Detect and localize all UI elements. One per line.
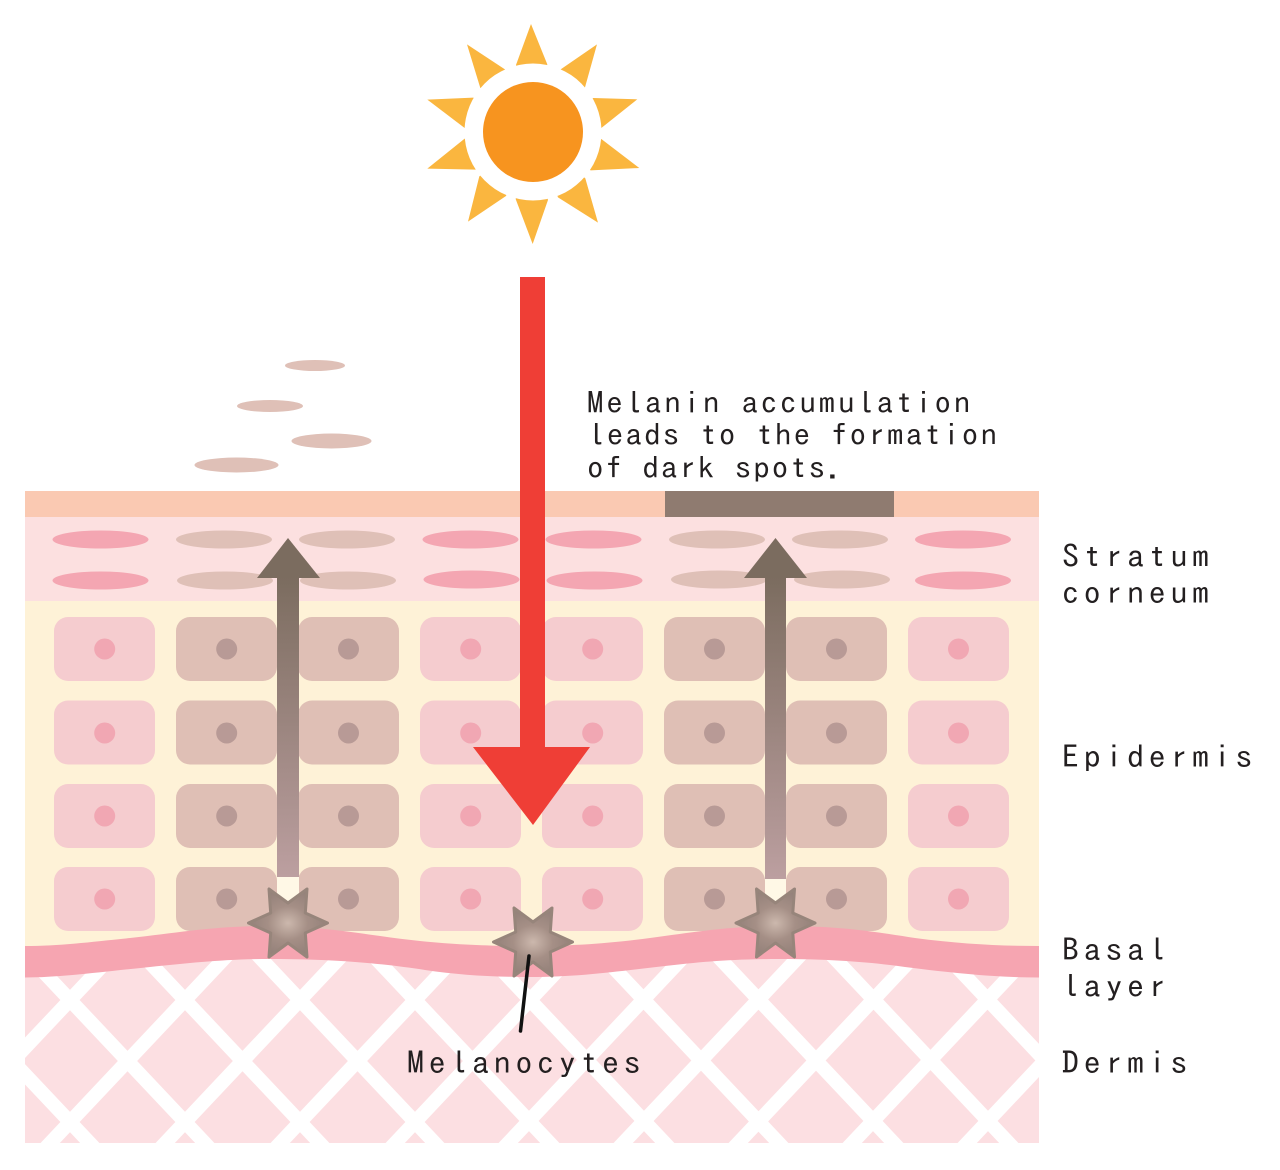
label: stratum corneum: [1062, 540, 1214, 608]
label: basal layer: Basal: [1062, 933, 1170, 965]
callout: melanin accumulation text: of dark spots.: [587, 452, 846, 482]
label: stratum corneum: Stratum: [1062, 540, 1214, 571]
shed skin flakes: [194, 360, 372, 472]
arrow: left melanin rising: [257, 538, 320, 905]
icon: sun: [427, 24, 639, 244]
epidermis cells: pigmented: [176, 617, 887, 931]
label: basal layer: [1062, 933, 1170, 1001]
epidermis cells: pink: [54, 617, 1009, 931]
corneum cells: [52, 530, 1011, 590]
label: basal layer: layer: [1062, 970, 1170, 1001]
callout: melanin accumulation text: leads to the formation: [588, 419, 999, 449]
callout: melanin accumulation text: Melanin accumulation: [587, 387, 973, 417]
leader line to melanocytes: [520, 956, 529, 1031]
arrow: UV ray: [473, 277, 590, 825]
icon: melanocyte centre: [494, 908, 572, 976]
panel: dermis lattice: [25, 959, 1039, 1143]
label: melanocytes: Melanocytes: [407, 1046, 645, 1078]
arrow: right melanin rising: [744, 538, 807, 905]
label: stratum corneum: corneum: [1062, 576, 1214, 608]
icon: melanocyte right: [736, 889, 815, 957]
panel: stratum corneum layer: [25, 491, 1039, 601]
icon: melanocyte left: [248, 889, 328, 957]
panel: basal layer wave: [25, 926, 1039, 978]
cell nuclei: pink: [94, 638, 969, 910]
callout: melanin accumulation text: [587, 387, 999, 482]
panel: epidermis layer: [25, 601, 1039, 961]
cell nuclei: pigmented: [216, 638, 847, 910]
label: dermis: Dermis: [1062, 1046, 1192, 1078]
label: epidermis: Epidermis: [1062, 740, 1257, 772]
